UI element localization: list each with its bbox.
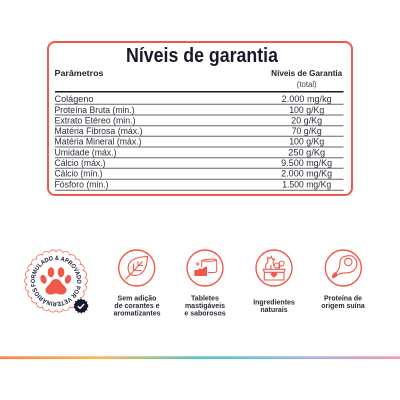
table rows: 2.000 mg/Kg [281, 169, 332, 179]
icon: tablets [187, 250, 223, 286]
label [113, 296, 161, 318]
table rows: 9.500 mg/Kg [281, 158, 332, 168]
table rows: Cálcio (mín.) [54, 169, 103, 179]
label: de corantes e [114, 303, 160, 310]
badge: approved by veterinarians [24, 250, 88, 314]
label: naturais [260, 307, 288, 314]
table rows: Colágeno [54, 94, 94, 104]
table header: guarantee levels: Níveis de Garantia [271, 69, 343, 78]
feature: chewable tablets [184, 250, 226, 318]
table rows: 2.000 mg/kg [282, 94, 332, 104]
icon: check seal [74, 300, 88, 312]
label: Proteína de [324, 296, 362, 302]
table rows [54, 92, 344, 190]
label: e saborosos [184, 310, 226, 318]
label: Tabletes [191, 296, 219, 302]
icon: leaf [119, 250, 155, 286]
table rows: 70 g/Kg [292, 126, 322, 136]
icon: ham [325, 250, 361, 286]
icon: crate [256, 250, 292, 286]
label [321, 296, 365, 310]
table rows: 250 g/Kg [288, 148, 325, 158]
title: Níveis de garantia [126, 45, 279, 67]
table rows: Fósforo (min.) [54, 180, 109, 190]
table rows: Matéria Mineral (máx.) [54, 137, 142, 147]
feature: natural ingredients [253, 250, 295, 314]
label: Sem adição [118, 296, 156, 302]
table rows: Cálcio (máx.) [54, 158, 106, 168]
rainbow gradient bar [0, 356, 400, 359]
icon: paw [39, 267, 72, 295]
table rows: Umidade (máx.) [54, 148, 117, 158]
label [253, 300, 295, 314]
badge ring text: FORMULADO & APROVADO POR VETERINÁRIOS [30, 256, 82, 306]
label: mastigáveis [185, 303, 225, 310]
label [184, 296, 226, 318]
table rows: 100 g/Kg [289, 105, 324, 115]
table header: guarantee levels [271, 69, 343, 89]
table rows: 20 g/Kg [291, 116, 322, 126]
table rows: Extrato Etéreo (min.) [54, 116, 136, 126]
table rows: 100 g/Kg [289, 137, 324, 147]
table rows: Matéria Fibrosa (máx.) [54, 126, 143, 136]
label: Ingredientes [253, 300, 295, 306]
feature: pork protein [321, 250, 365, 310]
table rows: Proteína Bruta (min.) [54, 105, 135, 115]
feature: no additives [113, 250, 161, 318]
table header: parameters: Parâmetros [54, 69, 104, 78]
table rows: 1.500 mg/Kg [282, 180, 331, 190]
label: origem suína [321, 303, 365, 310]
table header: guarantee levels: (total) [297, 80, 317, 89]
panel: nutrition table [48, 42, 352, 195]
label: aromatizantes [113, 310, 161, 318]
